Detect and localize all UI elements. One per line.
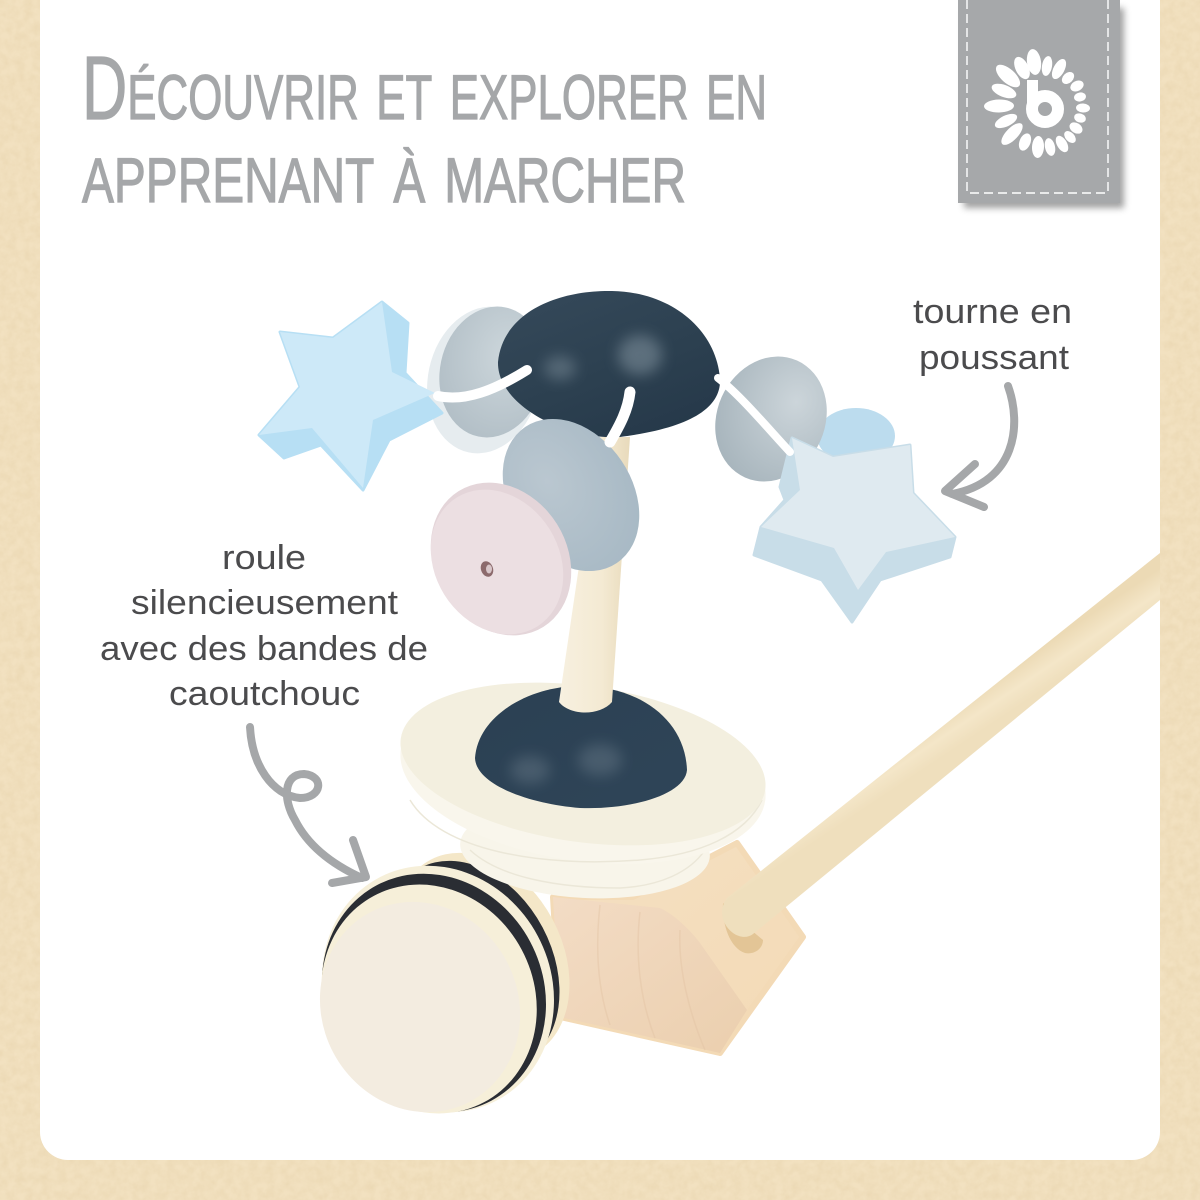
callout: roule silencieusement: caoutchouc <box>169 675 360 713</box>
callout: roule silencieusement <box>100 539 428 713</box>
callout: tourne en poussant: poussant <box>919 339 1070 377</box>
toy: rear grey bead <box>414 296 557 464</box>
title: apprenant à marcher <box>82 122 686 222</box>
toy: white strings <box>438 370 790 452</box>
toy: lower dark dome <box>475 686 687 808</box>
toy: front grey bead <box>475 393 667 597</box>
toy: right pale star <box>754 438 955 622</box>
toy: pink disc <box>403 456 599 662</box>
callout: tourne en poussant <box>913 293 1072 377</box>
toy: left blue star <box>259 302 442 490</box>
title: Découvrir et explorer en <box>82 39 767 139</box>
icon: sunflower petals <box>984 48 1090 158</box>
icon: letter b <box>1027 80 1058 122</box>
title <box>82 39 767 222</box>
toy: top dark dome <box>498 291 720 437</box>
logo tag <box>958 0 1124 208</box>
toy: rear wheel section <box>340 822 604 1108</box>
toy: right grey bead <box>696 339 846 499</box>
toy: central stick <box>559 437 630 712</box>
callout: roule silencieusement: avec des bandes de <box>100 630 428 668</box>
toy: base disc stack <box>389 661 777 904</box>
callout: tourne en poussant: tourne en <box>913 293 1072 331</box>
toy: right blue bead <box>817 408 895 464</box>
arrow: to top toy <box>945 386 1014 507</box>
toy: wooden block <box>553 843 803 1053</box>
arrow: to wheel <box>250 727 366 883</box>
callout: roule silencieusement: roule <box>222 539 306 577</box>
toy: push pole <box>722 553 1160 937</box>
toy: front wheel <box>279 825 597 1153</box>
callout: roule silencieusement: silencieusement <box>131 584 399 622</box>
